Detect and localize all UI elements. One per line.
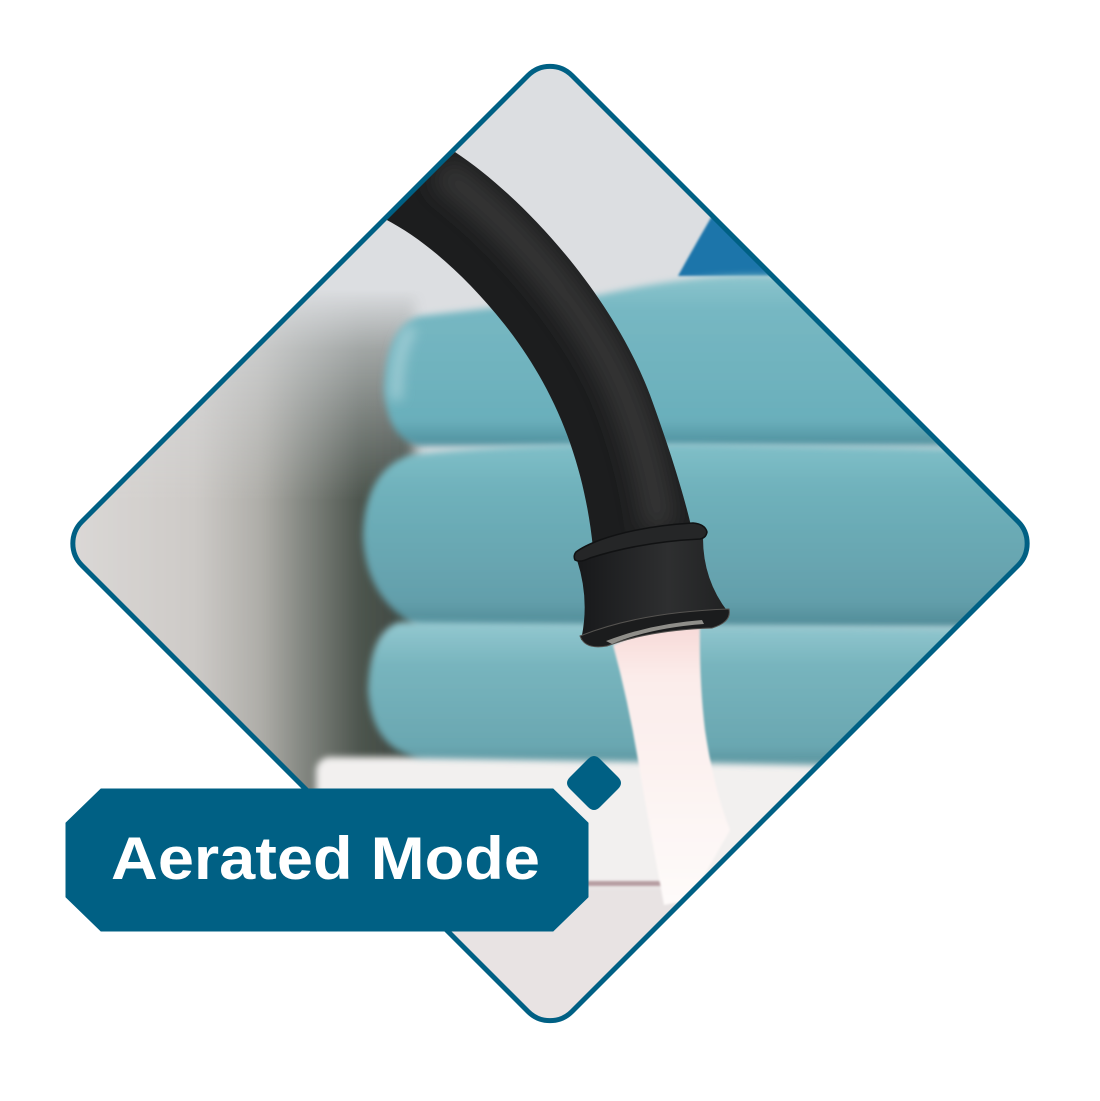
- faucet spout: [385, 152, 729, 647]
- lower counter: [452, 888, 676, 1018]
- bottom towel: [368, 622, 1000, 768]
- left wall shading: [76, 297, 424, 788]
- stream of water: [613, 620, 730, 905]
- label badge: Aerated Mode: [66, 789, 588, 931]
- infographic canvas: [66, 64, 1030, 1024]
- blue towel behind: [677, 217, 770, 278]
- top towel: [384, 275, 960, 446]
- middle towel: [363, 444, 1040, 628]
- badge text: Aerated Mode: [111, 825, 540, 892]
- faucet aerator body: [577, 538, 729, 640]
- photo: faucet and towels inside diamond: [75, 69, 1025, 1018]
- background wall: [170, 69, 943, 456]
- diamond frame: [73, 66, 1027, 1021]
- spout soft highlight: [440, 170, 660, 530]
- white shelf: [316, 757, 836, 886]
- aerator rim: [580, 609, 729, 647]
- aerator opening: [606, 620, 704, 644]
- badge background: [66, 789, 588, 931]
- faucet collar ring: [574, 523, 707, 561]
- small diamond accent: [567, 756, 621, 810]
- top towel left highlight: [396, 328, 412, 400]
